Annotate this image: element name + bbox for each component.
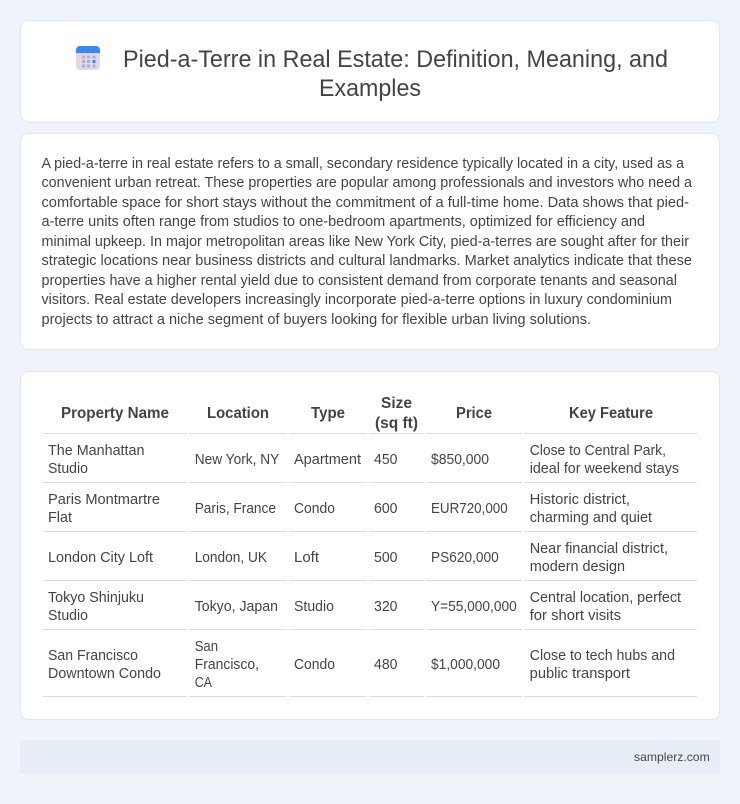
table row: San Francisco Downtown Condo: 480 <box>374 657 398 673</box>
table row: San Francisco Downtown Condo: $1,000,000 <box>431 657 500 673</box>
table row: Tokyo Shinjuku Studio: for short visits <box>530 608 621 624</box>
text block: description paragraph: a-terre units often range from studios to one-bedroom apartments, optimized for efficiency and <box>42 214 645 230</box>
table row: Tokyo Shinjuku Studio: Studio <box>294 599 334 615</box>
table row: The Manhattan Studio: New York, NY <box>195 452 280 468</box>
table row: London City Loft: London, UK <box>195 550 267 566</box>
table row: Tokyo Shinjuku Studio: Central location, perfect <box>530 590 681 606</box>
text block: description paragraph: visitors. Real estate developers increasingly incorporate pied-a-terre options in luxury condominium <box>42 292 672 308</box>
table row: London City Loft: PS620,000 <box>431 550 499 566</box>
table row: The Manhattan Studio: The Manhattan <box>48 443 144 459</box>
table row: Tokyo Shinjuku Studio: 320 <box>374 599 398 615</box>
title: Pied-a-Terre in Real Estate: Definition, Meaning, and <box>123 46 668 73</box>
table row: The Manhattan Studio: $850,000 <box>431 452 489 468</box>
table row: Tokyo Shinjuku Studio: Studio <box>48 608 88 624</box>
table header row <box>61 395 653 432</box>
table row: Paris Montmartre Flat <box>48 492 652 526</box>
table row: Paris Montmartre Flat: Historic district, <box>530 492 630 508</box>
table header row: Size <box>381 395 412 412</box>
panel: description <box>20 134 720 350</box>
table row: The Manhattan Studio: Close to Central Park, <box>530 443 666 459</box>
table header row: Price <box>456 405 492 422</box>
text block: description paragraph: convenient urban retreat. These properties are popular among professionals and investors who need a <box>42 175 693 191</box>
footer: samplerz.com <box>634 750 710 764</box>
table row: London City Loft: 500 <box>374 550 398 566</box>
table row: San Francisco Downtown Condo: CA <box>195 675 212 691</box>
table row: London City Loft <box>48 541 668 575</box>
table row: San Francisco Downtown Condo: San Francisco <box>48 648 138 664</box>
table row: San Francisco Downtown Condo: Downtown Condo <box>48 666 161 682</box>
text block: description paragraph: A pied-a-terre in real estate refers to a small, secondary residence typically located in a city, used as a <box>42 156 685 172</box>
table row: Tokyo Shinjuku Studio: Tokyo, Japan <box>195 599 278 615</box>
table row: Paris Montmartre Flat: Condo <box>294 501 335 517</box>
table row: San Francisco Downtown Condo <box>48 639 675 691</box>
table row: London City Loft: London City Loft <box>48 550 153 566</box>
table row: San Francisco Downtown Condo: Condo <box>294 657 335 673</box>
panel: header <box>20 20 720 122</box>
table row: Paris Montmartre Flat: Flat <box>48 510 72 526</box>
table header row: Location <box>207 405 269 422</box>
title: Examples <box>319 75 421 102</box>
panel: property table <box>20 372 720 720</box>
table row: The Manhattan Studio: ideal for weekend stays <box>530 461 679 477</box>
table row: Paris Montmartre Flat: Paris Montmartre <box>48 492 160 508</box>
table row: Tokyo Shinjuku Studio: Tokyo Shinjuku <box>48 590 144 606</box>
table header row: (sq ft) <box>375 415 418 432</box>
table row: The Manhattan Studio: Apartment <box>294 452 361 468</box>
title <box>123 46 668 102</box>
table row: Paris Montmartre Flat: EUR720,000 <box>431 501 508 517</box>
table row: London City Loft: Loft <box>294 550 319 566</box>
table row: Paris Montmartre Flat: Paris, France <box>195 501 276 517</box>
icon: calendar <box>76 46 100 70</box>
table header row: Property Name <box>61 405 169 422</box>
table row: Paris Montmartre Flat: charming and quiet <box>530 510 652 526</box>
footer <box>20 740 720 774</box>
text block: description paragraph: comfortable space for short stays without the commitment of a full-time home. Data shows that pied- <box>42 195 689 211</box>
table row: Tokyo Shinjuku Studio <box>48 590 681 624</box>
table row: London City Loft: Near financial district, <box>530 541 668 557</box>
table row: San Francisco Downtown Condo: Francisco, <box>195 657 259 673</box>
table row: San Francisco Downtown Condo: San <box>195 639 218 655</box>
table header row: Key Feature <box>569 405 653 422</box>
table row: Paris Montmartre Flat: 600 <box>374 501 398 517</box>
table row: San Francisco Downtown Condo: Close to tech hubs and <box>530 648 675 664</box>
table row: The Manhattan Studio: 450 <box>374 452 398 468</box>
text block: description paragraph: properties have a higher rental yield due to consistent demand from corporate tenants and seasonal <box>42 273 677 289</box>
text block: description paragraph: strategic locations near business districts and cultural landmarks. Market analytics indicate that these <box>42 253 692 269</box>
table row: The Manhattan Studio: Studio <box>48 461 88 477</box>
table header row: Type <box>311 405 345 422</box>
table row: Tokyo Shinjuku Studio: Y=55,000,000 <box>431 599 517 615</box>
table row: San Francisco Downtown Condo: public transport <box>530 666 630 682</box>
text block: description paragraph: minimal upkeep. In major metropolitan areas like New York City, pied-a-terres are sought after for their <box>42 234 689 250</box>
text block: description paragraph: projects to attract a niche segment of buyers looking for flexible urban living solutions. <box>42 312 591 328</box>
table row: The Manhattan Studio <box>48 443 679 477</box>
table row: London City Loft: modern design <box>530 559 625 575</box>
text block: description paragraph <box>42 156 693 328</box>
